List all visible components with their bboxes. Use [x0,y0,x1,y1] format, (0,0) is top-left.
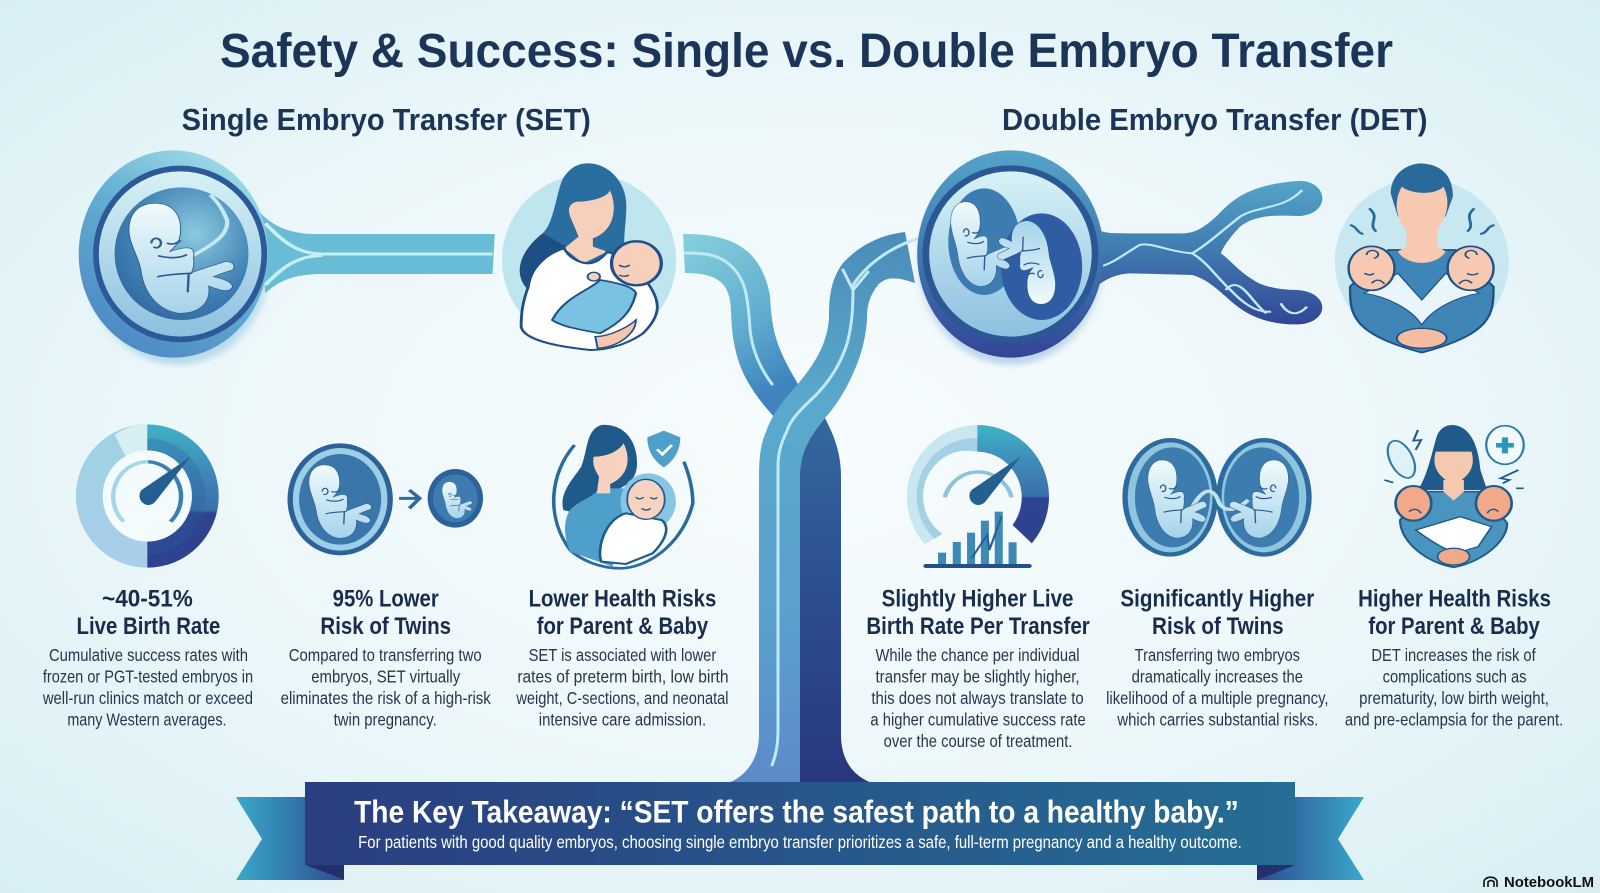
stat: lower health risks: intensive care admission. [539,710,706,730]
icon: gauge 40-51% [76,424,219,568]
stat: significantly higher risk of twins: likelihood of a multiple pregnancy, [1106,688,1329,708]
SET text [42,103,729,730]
heading: DET: Double Embryo Transfer (DET) [1002,103,1428,137]
stat: higher health risks: prematurity, low birth weight, [1359,688,1549,708]
stat: slightly higher live birth rate: a higher cumulative success rate [870,710,1086,730]
panel: Double Embryo Transfer [866,103,1563,751]
takeaway subtext: For patients with good quality embryos, choosing single embryo transfer prioritizes a safe, full-term pregnancy and a healthy outcome. [358,832,1242,852]
stat: slightly higher live birth rate: Birth Rate Per Transfer [866,613,1090,640]
stat: significantly higher risk of twins: which carries substantial risks. [1116,710,1318,730]
stat: live birth rate: Live Birth Rate [77,613,220,640]
stat: slightly higher live birth rate: transfer may be slightly higher, [876,667,1080,687]
stat: slightly higher live birth rate: over the course of treatment. [884,731,1072,751]
icon: parent holding baby [502,163,676,350]
stat: lower health risks: weight, C-sections, and neonatal [515,688,729,708]
stat: lower risk of twins [281,586,491,730]
stat: significantly higher risk of twins: Significantly Higher [1120,586,1315,613]
stat: lower health risks: SET is associated with lower [529,645,716,665]
stat: lower risk of twins: twin pregnancy. [334,710,437,730]
connector highlights [685,238,920,765]
takeaway headline: The Key Takeaway: “SET offers the safest path to a healthy baby.” [354,793,1239,829]
stat: live birth rate: many Western averages. [67,710,227,730]
NotebookLM logo: NotebookLM [1504,875,1594,891]
icon: single embryo in ring [79,150,495,365]
stat: higher health risks: for Parent & Baby [1368,613,1540,640]
icon: parent and swaddled baby with shield [554,425,693,568]
stat: significantly higher risk of twins [1106,586,1329,730]
stat: lower risk of twins: eliminates the risk of a high-risk [281,688,491,708]
icon: fewer twins embryo arrow [287,443,483,555]
stat: higher health risks: complications such as [1383,667,1527,687]
stat: live birth rate: Cumulative success rates with [49,645,248,665]
panel: central tree connector [683,232,920,784]
stat: lower risk of twins: Compared to transferring two [289,645,482,665]
stat: higher health risks: and pre-eclampsia for the parent. [1345,710,1563,730]
heading: SET: Single Embryo Transfer (SET) [182,103,591,137]
bar chart [938,512,1017,566]
stat: slightly higher live birth rate: Slightly Higher Live [882,586,1073,613]
stat: slightly higher live birth rate [866,586,1090,751]
stat: slightly higher live birth rate: While the chance per individual [876,645,1080,665]
stat: lower health risks: for Parent & Baby [537,613,709,640]
stat: significantly higher risk of twins: Risk of Twins [1152,613,1284,640]
panel: Single Embryo Transfer [42,103,729,730]
stat: live birth rate: frozen or PGT-tested embryos in [43,667,253,687]
dark right trunk [800,418,875,784]
stat: live birth rate [42,586,253,730]
stat: lower health risks: rates of preterm birth, low birth [517,667,729,687]
icon: linked twin embryos [1122,438,1312,557]
stat: live birth rate: ~40-51% [102,586,193,613]
icon: twin embryos in ring with forked connector [917,150,1322,365]
stat: lower health risks [515,586,729,730]
stat: lower risk of twins: 95% Lower [333,586,439,613]
stat: lower risk of twins: Risk of Twins [320,613,451,640]
DET branch and trunk [725,232,915,784]
stat: lower health risks: Lower Health Risks [529,586,716,613]
icon: stressed parent holding twins [1335,163,1509,353]
banner: key takeaway [236,782,1364,880]
stat: higher health risks [1345,586,1563,730]
stat: significantly higher risk of twins: Transferring two embryos [1135,645,1300,665]
stat: live birth rate: well-run clinics match or exceed [42,688,253,708]
stat: higher health risks: DET increases the risk of [1371,645,1536,665]
stat: significantly higher risk of twins: dramatically increases the [1132,667,1303,687]
SET branch [683,234,798,418]
stat: higher health risks: Higher Health Risks [1358,586,1551,613]
DET text [866,103,1563,751]
title: Safety & Success: Single vs. Double Embryo Transfer [220,25,1393,78]
icon: gauge with bars [907,425,1049,568]
stat: slightly higher live birth rate: this does not always translate to [871,688,1084,708]
icon: worried parent with twins and bubbles [1382,425,1524,567]
stat: lower risk of twins: embryos, SET virtually [311,667,460,687]
